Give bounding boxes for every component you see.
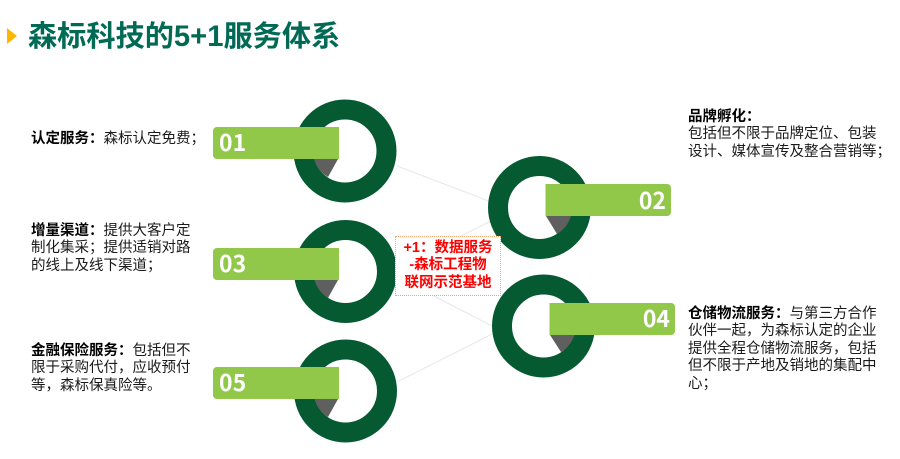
- item 02: ring, wedge and number bar: 02: [639, 182, 666, 216]
- text: warehousing and logistics: 仓储物流服务：与第三方合作: [688, 306, 876, 322]
- item 01: ring, wedge and number bar: 01: [219, 124, 246, 158]
- callout: +1 data service: [395, 236, 501, 296]
- callout: +1 data service: +1：数据服务: [403, 240, 493, 256]
- text: financial insurance: [31, 342, 190, 394]
- text: brand incubation: 包括但不限于品牌定位、包装: [688, 126, 876, 142]
- text: channel growth: 制化集采；提供适销对路: [31, 240, 190, 256]
- item 04: ring, wedge and number bar: 04: [643, 300, 670, 334]
- connector lines: [397, 166, 494, 382]
- text: brand incubation: 品牌孵化：: [688, 109, 760, 125]
- text: warehousing and logistics: [688, 305, 876, 392]
- text: financial insurance: 金融保险服务：包括但不: [31, 343, 190, 359]
- item 01: ring, wedge and number bar: [213, 110, 386, 192]
- text: channel growth: 增量渠道：提供大客户定: [31, 223, 190, 239]
- text: warehousing and logistics: 提供全程仓储物流服务，包括: [688, 341, 876, 357]
- text: warehousing and logistics: 心；: [688, 376, 717, 392]
- text: channel growth: [31, 222, 190, 274]
- icon: title marker triangle: [7, 28, 17, 44]
- item 03: ring, wedge and number bar: [213, 230, 387, 313]
- text: brand incubation: 设计、媒体宣传及整合营销等；: [688, 144, 891, 160]
- item 02: ring, wedge and number bar: [498, 166, 671, 249]
- text: brand incubation: [688, 108, 891, 160]
- callout: +1 data service: -森标工程物: [409, 257, 487, 273]
- text: warehousing and logistics: 伙伴一起，为森标认定的企业: [688, 323, 876, 339]
- text: warehousing and logistics: 但不限于产地及销地的集配中: [688, 358, 876, 374]
- text: financial insurance: 等，森标保真险等。: [31, 378, 162, 394]
- item 05: ring, wedge and number bar: [213, 350, 387, 432]
- item 05: ring, wedge and number bar: 05: [219, 364, 246, 398]
- text: certification service: 认定服务：森标认定免费；: [31, 131, 205, 147]
- text: channel growth: 的线上及线下渠道；: [31, 258, 162, 274]
- item 04: ring, wedge and number bar: [502, 284, 675, 368]
- text: financial insurance: 限于采购代付，应收预付: [31, 360, 190, 376]
- title: 森标科技的5+1服务体系: [28, 21, 340, 53]
- item 03: ring, wedge and number bar: 03: [219, 245, 246, 279]
- callout: +1 data service: 联网示范基地: [404, 275, 491, 291]
